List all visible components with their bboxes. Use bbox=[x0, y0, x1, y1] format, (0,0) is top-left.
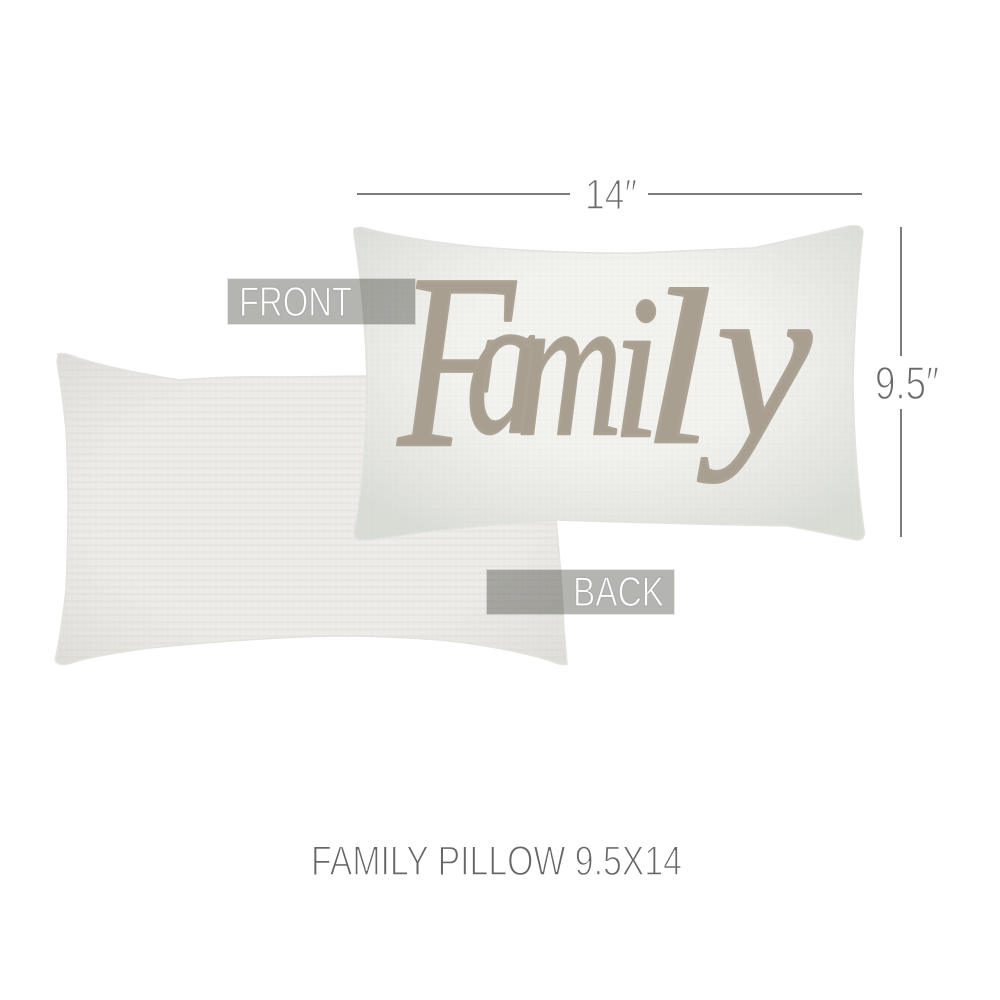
embroidered word: Family: m bbox=[516, 252, 623, 479]
height dimension: 9.5 inches: 9.5″ bbox=[875, 357, 939, 409]
width dimension: 14 inches: 14″ bbox=[585, 171, 637, 219]
embroidered word: Family: y bbox=[697, 233, 812, 483]
embroidered word: Family: a bbox=[466, 250, 540, 477]
label: BACK: BACK bbox=[573, 568, 664, 615]
embroidered word: Family bbox=[396, 224, 812, 500]
label: BACK bbox=[486, 568, 674, 615]
back pillow bbox=[55, 354, 567, 664]
embroidered word: Family: i bbox=[612, 254, 660, 481]
label: FRONT: FRONT bbox=[239, 278, 352, 325]
front pillow bbox=[354, 226, 864, 540]
caption title: FAMILY PILLOW 9.5X14 bbox=[311, 837, 682, 884]
embroidered word: Family: l bbox=[642, 245, 713, 490]
embroidered word: Family: F bbox=[396, 224, 517, 500]
